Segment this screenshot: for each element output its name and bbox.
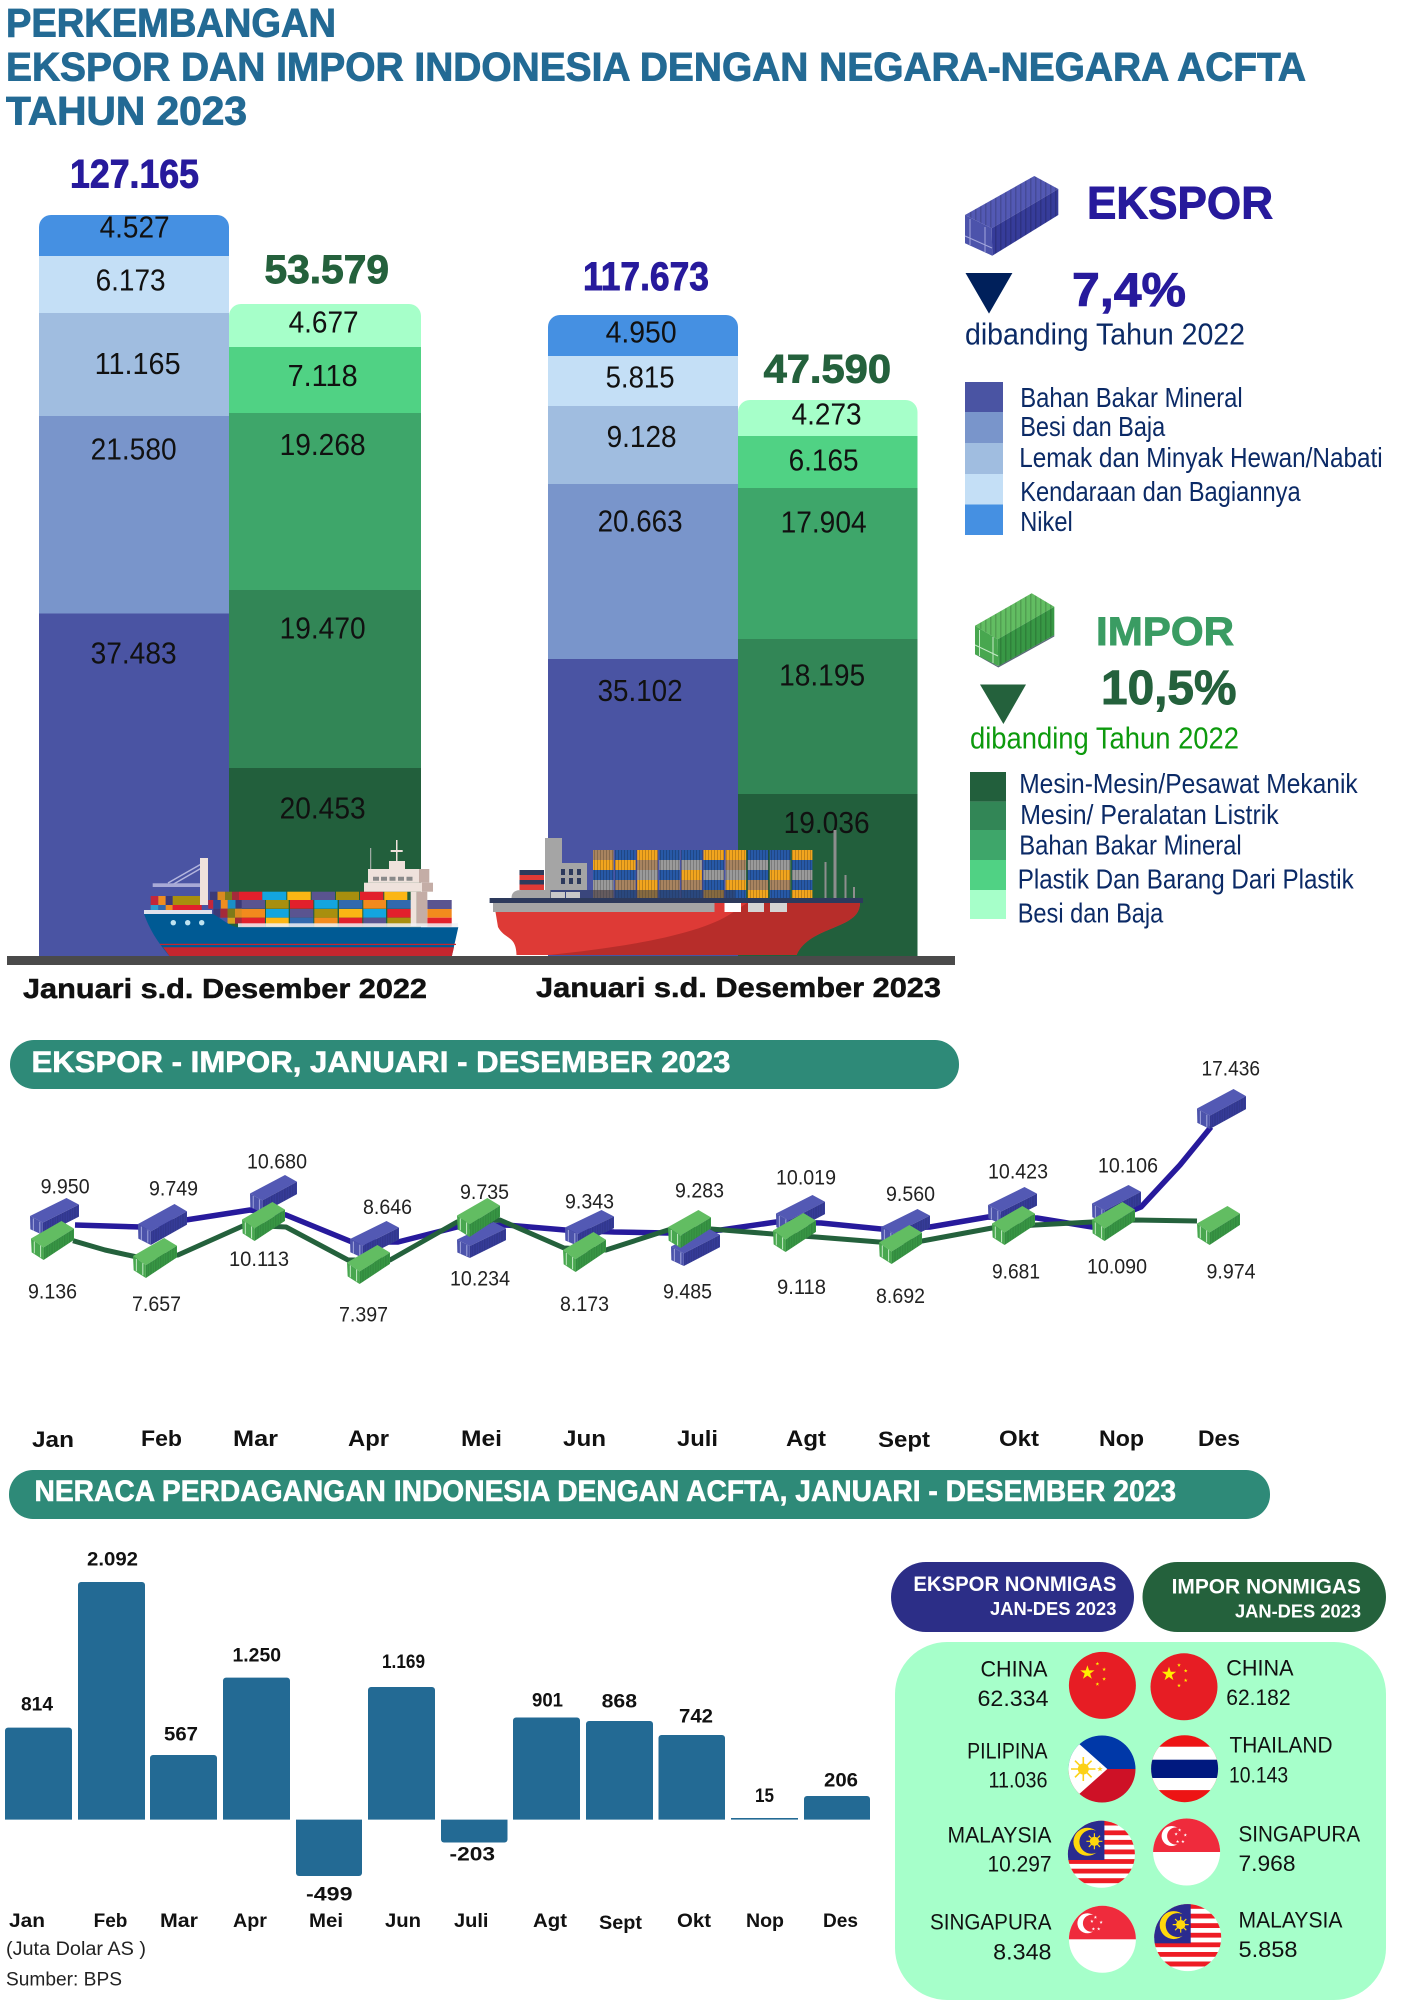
- bar values: [21, 1550, 858, 1906]
- flag: China left: [1069, 1652, 1136, 1719]
- bar values: 814: [21, 1695, 53, 1716]
- bar values: 19.268: [280, 427, 366, 462]
- main containers: [208, 892, 452, 927]
- impor country values: 62.182: [1226, 1685, 1290, 1710]
- ekspor country values: CHINA: [980, 1656, 1048, 1681]
- values: impor: 9.485: [663, 1281, 712, 1304]
- impor country values: 10.143: [1229, 1762, 1288, 1787]
- bar values: 15: [755, 1786, 774, 1807]
- hull: [144, 914, 458, 957]
- month axis: Sept: [599, 1913, 643, 1934]
- impor country values: THAILAND: [1230, 1733, 1332, 1758]
- ekspor country values: 11.036: [988, 1767, 1048, 1792]
- percent change: 10,5%: [1101, 662, 1236, 715]
- values: impor: 8.173: [560, 1293, 609, 1316]
- heading: EKSPOR: EKSPOR: [1087, 178, 1273, 228]
- values: ekspor: 9.950: [41, 1175, 90, 1198]
- line: impor: [73, 1220, 1197, 1260]
- month axis: Jan: [9, 1911, 45, 1932]
- bar values: 4.273: [792, 396, 862, 431]
- legend labels: Bahan Bakar Mineral: [1019, 830, 1242, 860]
- comparison note: dibanding Tahun 2022: [965, 316, 1245, 352]
- values: ekspor: 10.106: [1098, 1154, 1158, 1177]
- bar values: 6.173: [96, 263, 166, 298]
- flag: Philippines: [1068, 1734, 1136, 1804]
- title: PERKEMBANGAN: [6, 2, 336, 46]
- values: impor: 9.118: [777, 1276, 826, 1299]
- bar values: 567: [164, 1724, 198, 1746]
- bar totals: 53.579: [264, 248, 389, 292]
- bar chart: neraca perdagangan: [5, 1550, 870, 1934]
- bar values: 18.195: [779, 658, 865, 693]
- bar: ekspor 2023: [548, 315, 738, 956]
- bar values: -499: [306, 1885, 352, 1906]
- bar values: 901: [532, 1691, 563, 1712]
- ekspor country values: [930, 1656, 1052, 1964]
- impor country values: CHINA: [1226, 1655, 1294, 1680]
- legend labels: Kendaraan dan Bagiannya: [1020, 476, 1301, 507]
- legend swatches: [965, 382, 1003, 535]
- flag: Malaysia right: [1154, 1904, 1222, 1972]
- panel: negara mitra dagang: [895, 1642, 1386, 2000]
- legend labels: Mesin-Mesin/Pesawat Mekanik: [1019, 768, 1359, 799]
- bar totals: 117.673: [583, 255, 709, 299]
- month axis: Juli: [454, 1911, 488, 1932]
- legend panel: ekspor: [965, 176, 1383, 537]
- flag: Thailand: [1151, 1735, 1219, 1803]
- month axis: Sept: [878, 1427, 931, 1452]
- legend labels: [1019, 382, 1383, 537]
- values: impor: 7.657: [132, 1293, 181, 1316]
- values: impor: 7.397: [339, 1304, 388, 1327]
- month axis: Agt: [786, 1426, 827, 1451]
- bar values: 7.118: [288, 358, 358, 393]
- pill: impor nonmigas: IMPOR NONMIGAS: [1172, 1575, 1361, 1598]
- month axis: Okt: [999, 1426, 1040, 1451]
- bar values: 2.092: [87, 1550, 138, 1571]
- values: ekspor: 10.019: [776, 1167, 836, 1190]
- bar values: 4.950: [606, 314, 677, 349]
- bar values: 19.036: [784, 805, 870, 840]
- legend labels: [1018, 768, 1359, 928]
- values: impor: 9.681: [992, 1260, 1040, 1283]
- bar: ekspor 2022: [39, 215, 229, 956]
- legend labels: Plastik Dan Barang Dari Plastik: [1018, 864, 1355, 894]
- bar values: 37.483: [91, 635, 177, 670]
- markers: impor containers: [31, 1198, 1240, 1284]
- values: ekspor: 10.423: [988, 1161, 1048, 1184]
- ekspor country values: 10.297: [988, 1852, 1052, 1877]
- section heading: neraca perdagangan: NERACA PERDAGANGAN INDONESIA DENGAN ACFTA, JANUARI - DESEMBER 2023: [34, 1475, 1176, 1508]
- pill: ekspor nonmigas: [891, 1562, 1134, 1632]
- bridge: [364, 840, 433, 926]
- month axis: Mei: [309, 1911, 343, 1932]
- impor country values: 7.968: [1238, 1851, 1296, 1876]
- containers: [593, 850, 813, 898]
- ekspor country values: 8.348: [993, 1939, 1052, 1964]
- values: impor: 10.234: [450, 1268, 510, 1291]
- bar values: 35.102: [598, 673, 683, 708]
- values: ekspor: 8.646: [363, 1196, 412, 1219]
- axis label 2022: Januari s.d. Desember 2022: [23, 973, 427, 1004]
- baseline: [7, 956, 955, 965]
- month axis: Mei: [461, 1426, 502, 1451]
- line chart: monthly ekspor and impor: [28, 1058, 1260, 1452]
- rails: [144, 910, 458, 927]
- impor country values: 5.858: [1238, 1937, 1298, 1962]
- flag: Singapore right: [1153, 1818, 1221, 1886]
- masts: [824, 830, 855, 898]
- hull: [490, 898, 863, 955]
- values: impor: 10.090: [1087, 1256, 1147, 1279]
- bar totals: [70, 153, 891, 392]
- flag: China right: [1150, 1653, 1218, 1720]
- forward containers: [151, 896, 202, 910]
- pill: impor nonmigas: [1142, 1562, 1386, 1632]
- title: TAHUN 2023: [6, 90, 247, 134]
- legend panel: impor: [970, 593, 1359, 928]
- bar values: 742: [679, 1706, 713, 1728]
- month axis: Nop: [746, 1911, 784, 1932]
- values: ekspor: 9.735: [460, 1181, 509, 1204]
- legend labels: Nikel: [1020, 506, 1073, 537]
- impor country values: MALAYSIA: [1238, 1908, 1343, 1933]
- mast: [200, 858, 208, 905]
- values: impor: 8.692: [876, 1285, 925, 1308]
- icon: down arrow: [966, 273, 1012, 314]
- bar values: 9.128: [607, 419, 677, 454]
- month axis: Feb: [94, 1911, 127, 1932]
- month axis: Apr: [233, 1911, 268, 1932]
- month axis: Nop: [1099, 1426, 1144, 1451]
- impor country values: SINGAPURA: [1238, 1822, 1360, 1847]
- heading: IMPOR: IMPOR: [1096, 610, 1234, 654]
- ekspor country values: 62.334: [978, 1686, 1048, 1711]
- values: impor: 9.136: [28, 1281, 77, 1304]
- crane boom: [153, 863, 205, 887]
- values: ekspor: 9.343: [565, 1190, 614, 1213]
- stacked bar chart: 2022 and 2023: [39, 153, 918, 956]
- superstructure: [512, 838, 735, 898]
- icon: green container: [975, 593, 1054, 668]
- values: ekspor: 9.560: [886, 1183, 935, 1206]
- legend swatches: [970, 772, 1006, 919]
- pill: impor nonmigas: JAN-DES 2023: [1235, 1602, 1361, 1622]
- source note: Sumber: BPS: [6, 1970, 122, 1990]
- bar values: 1.169: [382, 1652, 425, 1673]
- bar: impor 2023: [738, 400, 918, 956]
- legend labels: Bahan Bakar Mineral: [1020, 382, 1243, 413]
- icon: blue container: [965, 176, 1058, 256]
- bar values: 11.165: [95, 346, 181, 381]
- month axis: Mar: [233, 1426, 279, 1451]
- bar values: 868: [602, 1692, 637, 1713]
- legend labels: Mesin/ Peralatan Listrik: [1020, 799, 1280, 830]
- values: impor: 10.113: [229, 1248, 289, 1271]
- bar values: 6.165: [789, 442, 859, 477]
- flag: Malaysia left: [1067, 1820, 1135, 1888]
- impor country values: [1226, 1655, 1360, 1962]
- bar values: -203: [450, 1844, 495, 1866]
- bars: [5, 1582, 870, 1876]
- month axis: Mar: [160, 1911, 199, 1932]
- bar values: 4.527: [100, 210, 170, 245]
- icon: ship 2022: [144, 840, 458, 957]
- values: impor: 9.974: [1206, 1260, 1256, 1283]
- ekspor country values: PILIPINA: [967, 1739, 1048, 1764]
- icon: down arrow: [980, 684, 1026, 724]
- bar values: 19.470: [280, 611, 366, 646]
- bar values: 5.815: [606, 359, 675, 394]
- values: ekspor: 10.680: [247, 1151, 307, 1174]
- month axis: Apr: [348, 1426, 389, 1451]
- ekspor country values: MALAYSIA: [948, 1822, 1052, 1847]
- bar values: 21.580: [91, 432, 177, 467]
- percent change: 7,4%: [1072, 263, 1186, 316]
- icon: ship 2023: [490, 830, 863, 955]
- line: ekspor: [75, 1127, 1211, 1242]
- ekspor country values: SINGAPURA: [930, 1910, 1052, 1935]
- bar values: 1.250: [232, 1646, 281, 1667]
- values: ekspor: [41, 1058, 1260, 1219]
- comparison note: dibanding Tahun 2022: [970, 720, 1239, 755]
- section heading: neraca perdagangan: [9, 1470, 1270, 1519]
- values: ekspor: 17.436: [1202, 1058, 1260, 1081]
- values: ekspor: 9.283: [675, 1180, 724, 1203]
- bar totals: 47.590: [764, 348, 891, 392]
- unit note: (Juta Dolar AS ): [6, 1939, 146, 1960]
- section heading: ekspor-impor: EKSPOR - IMPOR, JANUARI - DESEMBER 2023: [32, 1046, 730, 1079]
- month axis: Okt: [677, 1911, 712, 1932]
- bar values: 20.663: [598, 503, 683, 538]
- month axis: Jun: [385, 1911, 421, 1932]
- legend labels: Besi dan Baja: [1020, 411, 1166, 442]
- title: [6, 2, 1306, 134]
- month axis: [32, 1426, 1240, 1452]
- month axis: Des: [1198, 1426, 1240, 1451]
- month axis: Jan: [32, 1427, 74, 1452]
- bar values: [91, 210, 870, 840]
- values: ekspor: 9.749: [149, 1178, 198, 1201]
- bar values: 20.453: [280, 790, 366, 825]
- month axis: Feb: [141, 1426, 182, 1451]
- bar values: 206: [824, 1770, 858, 1791]
- values: impor: [28, 1248, 1256, 1327]
- month axis: Agt: [533, 1911, 568, 1932]
- markers: ekspor containers: [30, 1089, 1246, 1266]
- bar: impor 2022: [229, 304, 421, 956]
- month axis: [9, 1911, 858, 1934]
- month axis: Jun: [563, 1426, 606, 1451]
- title: EKSPOR DAN IMPOR INDONESIA DENGAN NEGARA-NEGARA ACFTA: [6, 45, 1306, 89]
- flag: Singapore left: [1068, 1905, 1136, 1973]
- month axis: Juli: [677, 1426, 718, 1451]
- legend labels: Besi dan Baja: [1018, 898, 1164, 928]
- month axis: Des: [823, 1911, 858, 1932]
- bar values: 17.904: [781, 505, 867, 540]
- bar totals: 127.165: [70, 153, 199, 197]
- axis label 2023: Januari s.d. Desember 2023: [536, 972, 941, 1003]
- bar values: 4.677: [289, 304, 359, 339]
- pill: ekspor nonmigas: JAN-DES 2023: [990, 1599, 1116, 1619]
- section heading: ekspor-impor: [10, 1040, 959, 1089]
- pill: ekspor nonmigas: EKSPOR NONMIGAS: [913, 1573, 1116, 1596]
